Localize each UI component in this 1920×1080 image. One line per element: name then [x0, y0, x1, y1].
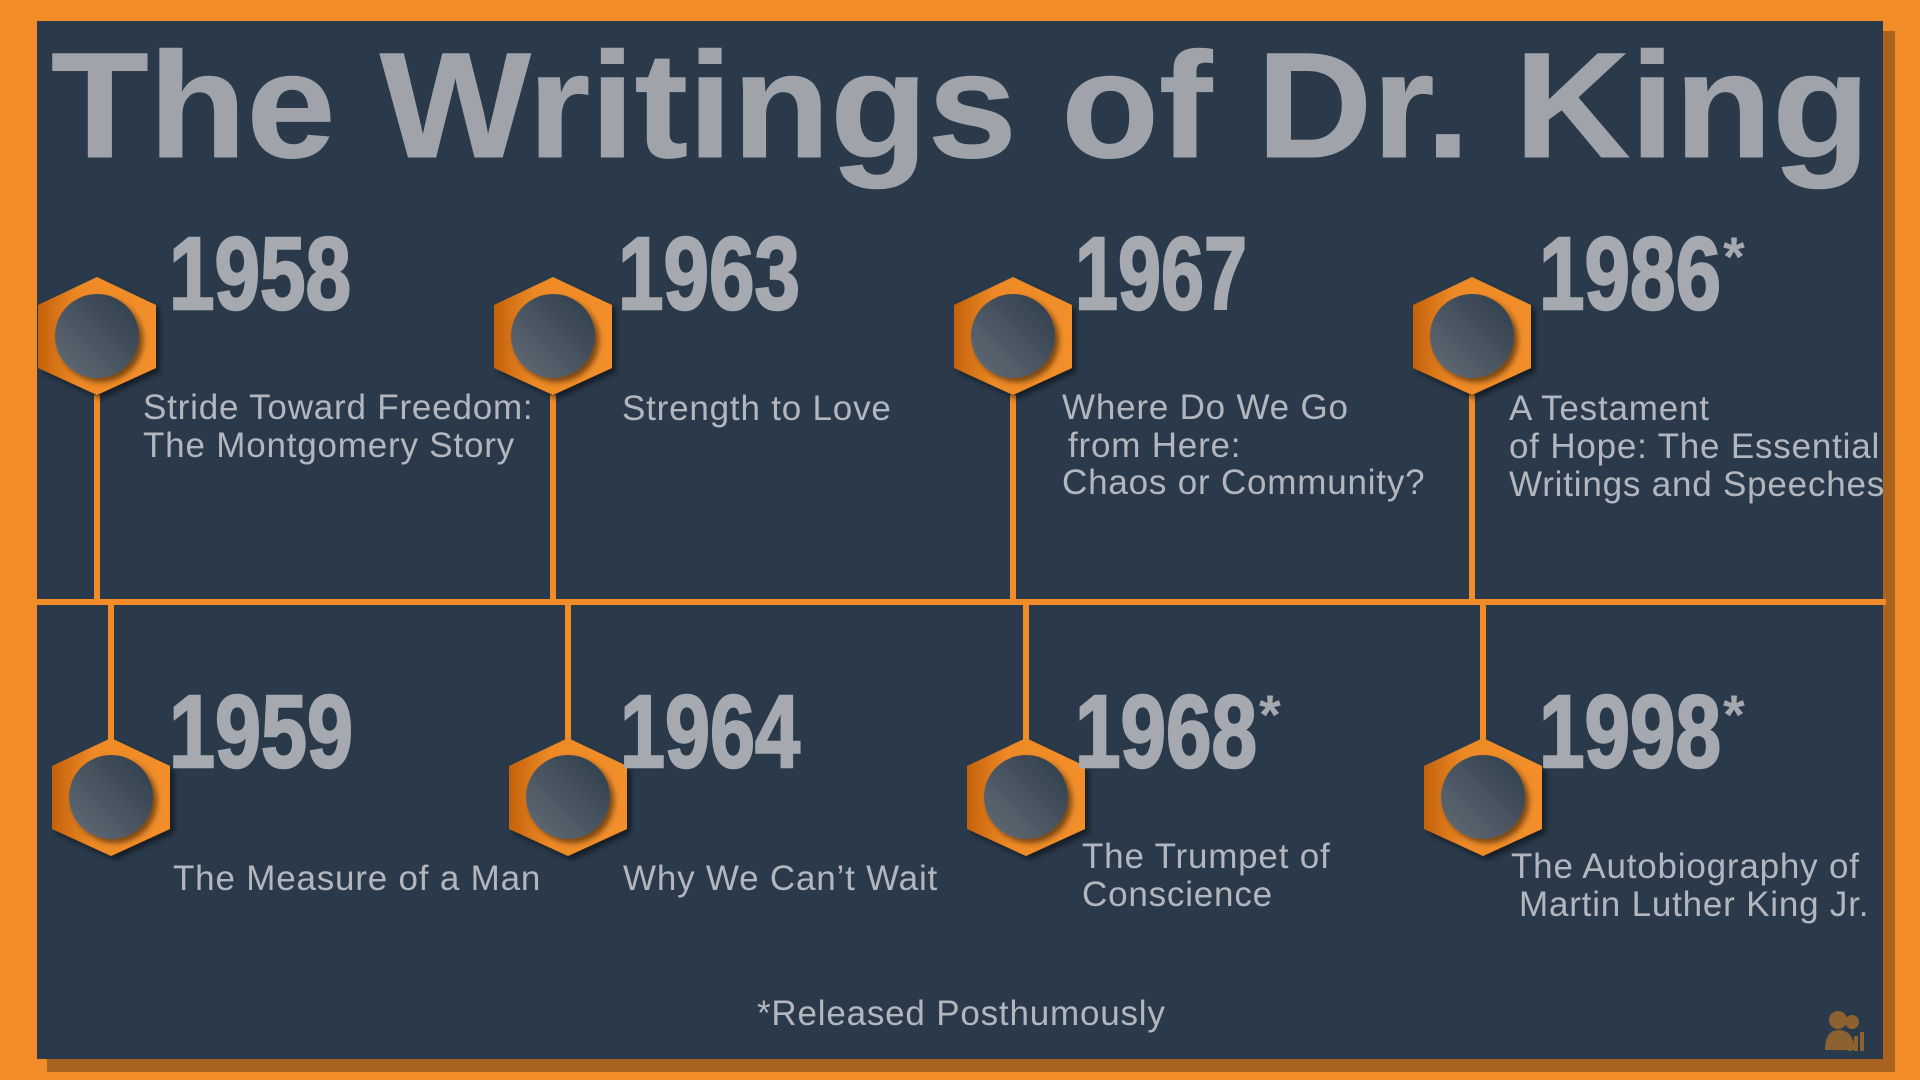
- entry: 1958: Stride Toward Freedom:: [143, 388, 533, 427]
- entry: 1963: [494, 216, 892, 428]
- entry: 1964: [509, 674, 938, 898]
- entry: 1986: 1986: [1539, 216, 1721, 331]
- icon: people chart logo: [1825, 1011, 1864, 1051]
- entry: 1968: [967, 674, 1331, 914]
- timeline axis: [37, 395, 1886, 740]
- entry: 1964: 1964: [620, 674, 800, 789]
- entry: 1968: 1968: [1075, 674, 1257, 789]
- title: The Writings of Dr. King: [51, 21, 1870, 189]
- entry: 1986: Writings and Speeches: [1509, 465, 1885, 504]
- entry: 1998: Martin Luther King Jr.: [1519, 885, 1869, 924]
- entry: 1967: from Here:: [1068, 426, 1241, 465]
- entry: 1968: Conscience: [1082, 875, 1273, 914]
- entry: 1963: Strength to Love: [622, 389, 892, 428]
- entry: 1986: of Hope: The Essential: [1509, 427, 1880, 466]
- entry: 1986: [1413, 216, 1885, 504]
- entry: 1998: [1424, 674, 1869, 924]
- entry: 1958: 1958: [169, 216, 351, 331]
- entry: 1958: [38, 216, 533, 465]
- entry: 1986: *: [1723, 225, 1745, 288]
- entry: 1968: The Trumpet of: [1082, 837, 1331, 876]
- entry: 1986: A Testament: [1509, 389, 1710, 428]
- entry: 1967: Chaos or Community?: [1062, 463, 1425, 502]
- entry: 1958: The Montgomery Story: [143, 426, 515, 465]
- entry: 1959: [52, 674, 541, 898]
- footnote: *Released Posthumously: [757, 994, 1166, 1033]
- entry: 1964: Why We Can’t Wait: [623, 859, 938, 898]
- entry: 1968: *: [1259, 683, 1281, 746]
- entry: 1963: 1963: [618, 216, 800, 331]
- entry: 1967: [954, 216, 1425, 502]
- entry: 1998: The Autobiography of: [1511, 847, 1860, 886]
- entry: 1967: Where Do We Go: [1062, 388, 1349, 427]
- entry: 1959: 1959: [169, 674, 353, 789]
- entry: 1998: *: [1723, 683, 1745, 746]
- entry: 1967: 1967: [1075, 216, 1247, 331]
- entry: 1959: The Measure of a Man: [173, 859, 541, 898]
- entry: 1998: 1998: [1539, 674, 1721, 789]
